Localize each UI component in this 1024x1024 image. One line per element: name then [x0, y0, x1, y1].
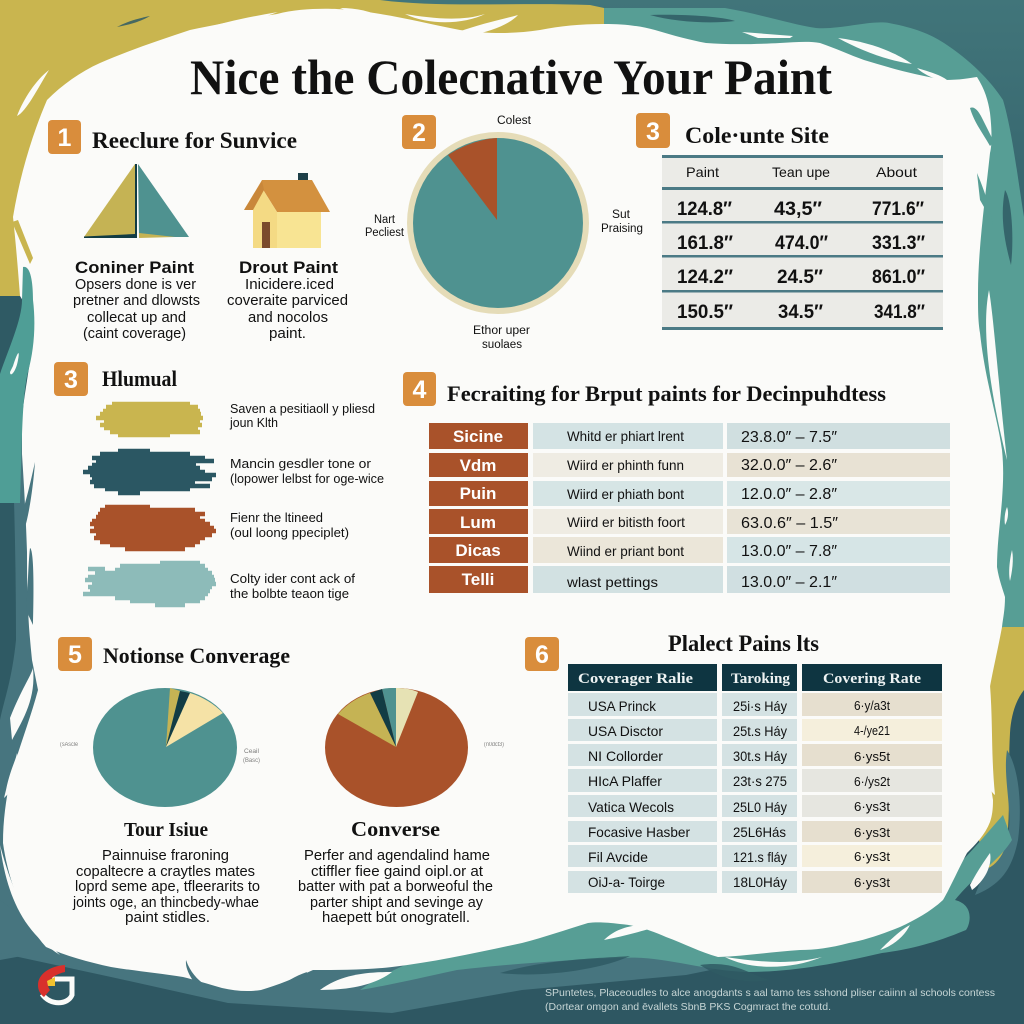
table cells	[568, 693, 942, 893]
section 5: coverage pies	[58, 637, 504, 926]
table col 2: 25t.s Háy	[733, 724, 787, 739]
badge 3 second	[54, 362, 88, 396]
swatch descriptions: Fienr the ltineed	[230, 511, 323, 525]
tiny pie labels: (Basc)	[243, 758, 260, 764]
table values: 771.6″	[872, 199, 924, 220]
table values: 124.8″	[677, 199, 732, 220]
body right	[298, 848, 493, 926]
label: Coniner Paint: Opsers done is ver	[75, 276, 196, 293]
body right: batter with pat a borweoful the	[298, 879, 493, 895]
body left: loprd seme ape, tfleerarits to	[75, 879, 260, 895]
border: left mid-tone strip	[0, 396, 55, 960]
table ranges	[741, 429, 839, 591]
table col 3: 6·ys5t	[854, 750, 891, 764]
table descriptions: Whitd er phiart lrent	[567, 428, 684, 444]
swatch descriptions	[229, 402, 384, 601]
section 2: pie chart	[365, 115, 643, 351]
pie label left: Pecliest	[365, 227, 405, 239]
table values: 43,5″	[774, 199, 822, 220]
pie label top: Colest	[497, 115, 532, 127]
table col 3: 6·y/a3t	[854, 699, 890, 713]
section: Humual swatches	[54, 362, 384, 605]
table col 1: USA Princk	[588, 698, 657, 714]
border: left dark interior	[0, 395, 16, 720]
pie right	[325, 688, 468, 807]
icon: triangle	[84, 164, 189, 238]
table header: About	[876, 164, 917, 180]
footer note: (Dortear omgon and ēvallets SbnB PKS Cogmract the cotutd.	[545, 1001, 831, 1013]
badge 3	[636, 113, 670, 148]
heading 1: Reeclure for Sunvice	[92, 128, 297, 153]
body right: haepett bút onogratell.	[322, 910, 470, 926]
swatch descriptions: Saven a pesitiaoll y pliesd	[230, 402, 375, 416]
label: Drout Paint: Inicidere.iced	[245, 276, 334, 293]
table values: 474.0″	[775, 233, 828, 254]
swatch descriptions: joun Klth	[229, 416, 278, 430]
swatch descriptions: Colty ider cont ack of	[230, 572, 356, 586]
logo	[38, 965, 72, 1003]
table col 2: 18L0Háy	[733, 875, 787, 890]
table ranges: 63.0.6″ – 1.5″	[741, 515, 839, 532]
label: Drout Paint: Drout Paint	[239, 259, 339, 277]
tiny pie labels: Ceail	[244, 749, 259, 755]
table col 3: 6·ys3t	[854, 876, 891, 890]
badge 5: 5	[68, 641, 82, 669]
pie label right: Praising	[601, 223, 643, 235]
heading 4: Fecraiting for Brput paints for Decinpuhdtess	[447, 381, 886, 406]
table values: 331.3″	[872, 233, 925, 254]
table names: Sicine	[453, 427, 503, 446]
body left: Painnuise fraroning	[102, 848, 229, 864]
border: bottom mid-tone band	[0, 900, 760, 1013]
table descriptions: Wiird er phinth funn	[567, 457, 684, 473]
body right: ctiffler fiee gaind oipl.or at	[311, 864, 483, 880]
pie label bottom: suolaes	[482, 339, 522, 351]
table header bar: Covering Rate	[823, 671, 921, 687]
table header bar: Taroking	[731, 671, 790, 687]
table ranges: 12.0.0″ – 2.8″	[741, 486, 838, 503]
section 3: size table	[636, 113, 943, 330]
table values: 150.5″	[677, 302, 733, 323]
pie label left	[365, 214, 405, 239]
table cells	[429, 423, 950, 593]
table col 2: 121.s fláy	[733, 850, 787, 865]
badge 6: 6	[535, 641, 549, 669]
heading 6: Plalect Pains lts	[668, 631, 819, 656]
badge 2	[402, 115, 436, 149]
heading Humual: Hlumual	[102, 366, 177, 391]
table header	[686, 164, 917, 180]
badge 5	[58, 637, 92, 671]
title: Nice the Colecnative Your Paint	[190, 49, 832, 105]
badge 6	[525, 637, 559, 671]
table col 1: Fil Avcide	[588, 849, 648, 865]
badge 1	[48, 120, 81, 154]
label: Drout Paint: and nocolos	[248, 309, 328, 326]
badge 4: 4	[413, 376, 427, 404]
table values: 24.5″	[777, 267, 823, 288]
table names: Telli	[462, 570, 494, 589]
table col 3: 6·ys3t	[854, 850, 891, 864]
table col 3: 4-/ye21	[854, 724, 890, 738]
label: Coniner Paint	[73, 259, 200, 342]
table names: Puin	[460, 484, 496, 503]
border: mid-tone spikes	[18, 462, 307, 990]
body left	[72, 848, 260, 926]
tiny pie labels	[60, 742, 504, 764]
table names: Lum	[460, 513, 496, 532]
table col 2	[733, 699, 787, 890]
swatch: rust	[90, 507, 216, 549]
table ranges: 13.0.0″ – 7.8″	[741, 543, 838, 560]
body right: Perfer and agendalind hame	[304, 848, 490, 864]
table descriptions: wlast pettings	[566, 574, 658, 590]
heading 3: Cole·unte Site	[685, 123, 829, 148]
subhead: Tour Isiue: Tour Isiue	[124, 819, 208, 841]
table col 2: 25L6Hás	[733, 825, 786, 840]
table values	[677, 199, 925, 323]
table col 2: 25i·s Háy	[733, 699, 787, 714]
table values: 124.2″	[677, 267, 733, 288]
body left: paint stidles.	[125, 910, 210, 926]
swatch descriptions: (lopower lelbst for oge-wice	[230, 472, 384, 486]
table values: 341.8″	[874, 302, 925, 323]
table col 1: USA Disctor	[588, 723, 663, 739]
pie label left: Nart	[374, 214, 396, 226]
table names: Vdm	[460, 456, 496, 475]
table col 2: 25L0 Háy	[733, 800, 787, 815]
table header: Tean upe	[772, 164, 830, 180]
label: Coniner Paint: (caint coverage)	[83, 325, 186, 342]
table header bar	[568, 664, 942, 691]
swatch descriptions: Mancin gesdler tone or	[230, 457, 371, 471]
table col 3: 6·ys3t	[854, 800, 891, 814]
table names	[453, 427, 503, 589]
swatch: light teal	[83, 563, 216, 605]
pie left	[93, 688, 237, 807]
table col 3: 6·ys3t	[854, 826, 891, 840]
badge 1: 1	[58, 124, 72, 152]
table values: 861.0″	[872, 267, 925, 288]
pie label bottom: Ethor uper	[473, 325, 530, 337]
section 6: coverage table	[525, 631, 942, 893]
table header bar: Coverager Ralie	[578, 671, 693, 687]
body left: joints oge, an thincbedy-whae	[72, 895, 259, 911]
footer note: SPuntetes, Placeoudles to alce anogdants s aal tamo tes sshond pliser caiinn al schools contess	[545, 987, 995, 999]
table descriptions	[566, 428, 685, 590]
badge 2: 2	[412, 119, 426, 147]
label: Coniner Paint: pretner and dlowsts	[73, 292, 200, 309]
body right: parter shipt and sevinge ay	[310, 895, 484, 911]
border: yellow top-left sweep	[0, 0, 604, 296]
badge 3: 3	[646, 118, 660, 146]
border: left teal strip	[0, 267, 34, 503]
table header: Paint	[686, 164, 719, 180]
body left: copaltecre a craytles mates	[76, 864, 255, 880]
table ranges: 13.0.0″ – 2.1″	[741, 574, 838, 591]
tiny pie labels: (sAscle	[60, 742, 79, 748]
swatch descriptions: (oul loong ppeciplet)	[230, 526, 349, 540]
table col 1: NI Collorder	[588, 748, 663, 764]
pie label right	[601, 209, 643, 235]
swatch: dark teal	[83, 451, 216, 493]
label: Coniner Paint: Coniner Paint	[75, 259, 195, 277]
section 4: paint table	[403, 372, 950, 593]
pie ring and slices	[407, 132, 589, 314]
table ranges: 23.8.0″ – 7.5″	[741, 429, 838, 446]
pie label right: Sut	[612, 209, 631, 221]
label: Drout Paint: paint.	[269, 325, 306, 342]
table col 3: 6·/ys2t	[854, 775, 891, 789]
tiny pie labels: (n0dct3)	[484, 742, 504, 748]
swatch: yellow	[96, 404, 203, 435]
heading 5: Notionse Converage	[103, 643, 290, 668]
table col 1: OiJ-a- Toirge	[588, 874, 665, 890]
border: teal top-right band	[604, 8, 1024, 640]
table col 1: Focasive Hasber	[588, 824, 690, 840]
table values: 161.8″	[677, 233, 733, 254]
badge 4	[403, 372, 436, 406]
section 1: paint types	[48, 120, 348, 342]
footer note	[545, 987, 995, 1013]
badge 3 second: 3	[64, 366, 78, 394]
label: Drout Paint	[227, 259, 348, 342]
border: right mid-tone strip	[975, 750, 1020, 895]
table descriptions: Wiird er bitisth foort	[567, 514, 685, 530]
table names: Dicas	[455, 541, 501, 560]
table col 1	[588, 698, 690, 890]
subhead: Converse: Converse	[351, 817, 440, 841]
table col 2: 30t.s Háy	[733, 749, 787, 764]
table col 1: Vatica Wecols	[588, 799, 674, 815]
table col 2: 23t·s 275	[733, 774, 787, 789]
swatch descriptions: the bolbte teaon tige	[230, 587, 349, 601]
border: bottom teal band	[360, 815, 1012, 990]
table values: 34.5″	[778, 302, 823, 323]
table ranges: 32.0.0″ – 2.6″	[741, 457, 838, 474]
table col 1: HIcA Plaffer	[588, 773, 662, 789]
border: teal strokes inside paper	[970, 107, 994, 225]
icon: house	[244, 173, 330, 248]
pie label bottom	[473, 325, 530, 351]
table grid	[662, 155, 943, 330]
border: yellow spur	[12, 220, 33, 264]
table descriptions: Wiird er phiath bont	[567, 486, 684, 502]
label: Coniner Paint: collecat up and	[87, 309, 186, 326]
table col 3	[854, 699, 891, 890]
label: Drout Paint: coveraite parviced	[227, 292, 348, 309]
table descriptions: Wiind er priant bont	[567, 543, 684, 559]
border: right yellow drip	[975, 627, 1024, 870]
